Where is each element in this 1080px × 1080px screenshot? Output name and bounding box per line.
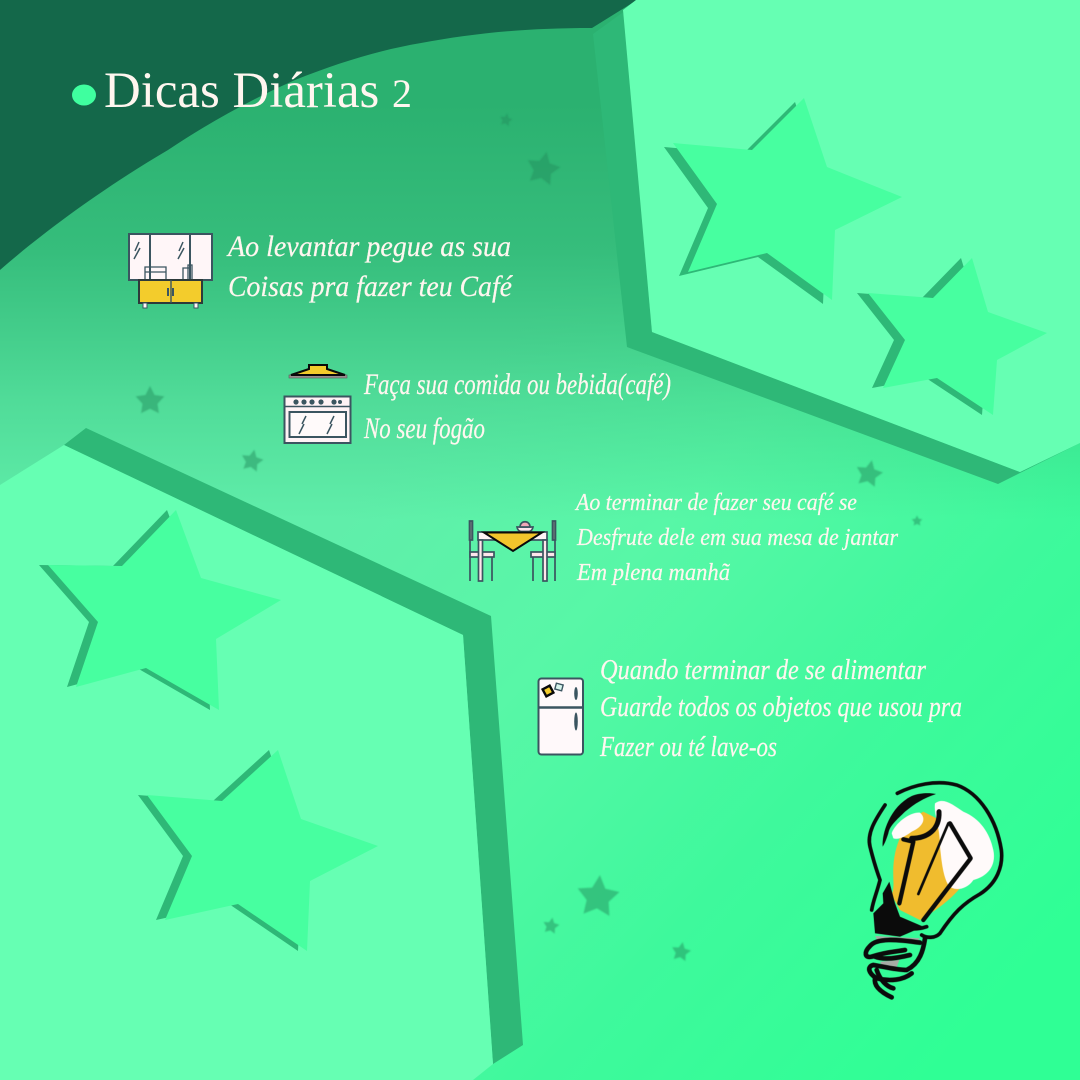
large star: lower left 1 (39, 510, 281, 710)
icon: light bulb (866, 783, 1002, 997)
title bullet (72, 84, 96, 106)
large star: upper right 1 (664, 98, 902, 304)
large star: upper right 2 (857, 258, 1047, 415)
text: step 4: Guarde todos os objetos que usou pra (600, 692, 962, 723)
text: step 3: Ao terminar de fazer seu café se (574, 490, 857, 516)
panel: lower left (0, 428, 523, 1080)
panel face: upper right (623, 0, 1080, 472)
panel shadow: lower left (64, 428, 523, 1064)
dark top-left corner shape (0, 0, 637, 270)
small background stars (136, 112, 922, 962)
icon: range hood (289, 365, 347, 378)
large star: lower left 2 (138, 750, 378, 951)
icon: refrigerator (538, 678, 583, 754)
text: step 3: Desfrute dele em sua mesa de jantar (576, 525, 899, 551)
text: step 2: Faça sua comida ou bebida(café) (363, 368, 671, 401)
panel face: lower left (0, 445, 493, 1080)
icon: dining table (470, 521, 556, 581)
text: step 3: Em plena manhã (576, 560, 730, 586)
panel shadow: upper right (593, 0, 1080, 484)
panel: upper right (593, 0, 1080, 484)
icon: kitchen cabinet (129, 234, 212, 308)
text: step 2: No seu fogão (363, 412, 485, 445)
text: step 2 (363, 368, 671, 445)
text: step 1: Ao levantar pegue as sua (226, 230, 511, 263)
icon: stove (284, 396, 351, 443)
text: step 3 (574, 490, 899, 586)
text: step 4 (599, 655, 962, 763)
text: step 1: Coisas pra fazer teu Café (228, 270, 514, 303)
title: Dicas Diárias 2 (104, 63, 412, 119)
text: step 4: Quando terminar de se alimentar (600, 655, 926, 686)
text: step 1 (226, 230, 514, 303)
text: step 4: Fazer ou té lave-os (599, 732, 777, 763)
